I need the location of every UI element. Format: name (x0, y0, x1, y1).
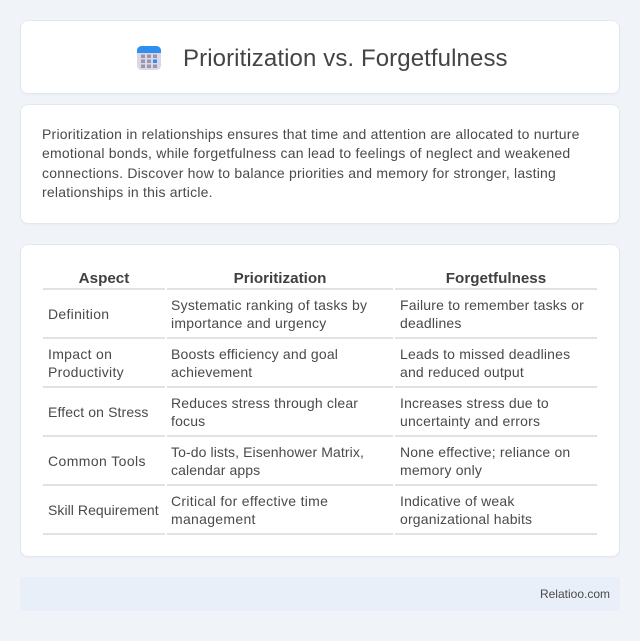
skill: forgetfulness: Indicative of weak (400, 493, 515, 509)
row: impact on productivity: Productivity (48, 364, 124, 380)
comparison table panel (20, 244, 620, 557)
header panel (20, 20, 620, 94)
skill: prioritization (171, 493, 328, 527)
row: definition: Definition (48, 306, 109, 322)
productivity: forgetfulness: and reduced output (400, 364, 524, 380)
tools: forgetfulness: None effective; reliance on (400, 444, 570, 460)
stress: prioritization (171, 395, 358, 429)
skill: forgetfulness: organizational habits (400, 511, 532, 527)
intro paragraph: Prioritization in relationships ensures that time and attention are allocated to nurture (42, 126, 580, 142)
productivity: forgetfulness (400, 346, 570, 380)
table header: aspect: Aspect (79, 270, 129, 287)
stress: forgetfulness: Increases stress due to (400, 395, 549, 411)
intro paragraph: relationships in this article. (42, 184, 213, 200)
table header: prioritization: Prioritization (234, 270, 326, 287)
row: impact on productivity: Impact on (48, 346, 112, 362)
title: Prioritization vs. Forgetfulness (183, 45, 508, 72)
tools: prioritization (171, 444, 364, 478)
intro paragraph (42, 126, 580, 200)
stress: forgetfulness: uncertainty and errors (400, 413, 540, 429)
productivity: prioritization (171, 346, 338, 380)
icon: calendar (137, 46, 161, 70)
productivity: prioritization: achievement (171, 364, 252, 380)
definition: prioritization (171, 297, 367, 331)
intro paragraph: connections. Discover how to balance priorities and memory for stronger, lasting (42, 165, 556, 181)
footer bar (20, 577, 620, 611)
productivity: forgetfulness: Leads to missed deadlines (400, 346, 570, 362)
footer credit: Relatioo.com (540, 587, 610, 601)
stress: prioritization: Reduces stress through clear (171, 395, 358, 411)
row: skill requirement: Skill Requirement (48, 502, 159, 518)
definition: prioritization: Systematic ranking of tasks by (171, 297, 367, 313)
stress: forgetfulness (400, 395, 549, 429)
table header: forgetfulness: Forgetfulness (446, 270, 546, 287)
row: common tools: Common Tools (48, 453, 146, 469)
definition: forgetfulness (400, 297, 584, 331)
definition: forgetfulness: Failure to remember tasks or (400, 297, 584, 313)
tools: forgetfulness (400, 444, 570, 478)
tools: prioritization: To-do lists, Eisenhower Matrix, (171, 444, 364, 460)
stress: prioritization: focus (171, 413, 205, 429)
skill: forgetfulness (400, 493, 532, 527)
tools: prioritization: calendar apps (171, 462, 260, 478)
intro text panel (20, 104, 620, 224)
definition: prioritization: importance and urgency (171, 315, 326, 331)
tools: forgetfulness: memory only (400, 462, 482, 478)
definition: forgetfulness: deadlines (400, 315, 462, 331)
row: impact on productivity (48, 346, 124, 380)
row: effect on stress: Effect on Stress (48, 404, 148, 420)
skill: prioritization: management (171, 511, 256, 527)
skill: prioritization: Critical for effective time (171, 493, 328, 509)
productivity: prioritization: Boosts efficiency and goal (171, 346, 338, 362)
intro paragraph: emotional bonds, while forgetfulness can lead to feelings of neglect and weakened (42, 145, 570, 161)
